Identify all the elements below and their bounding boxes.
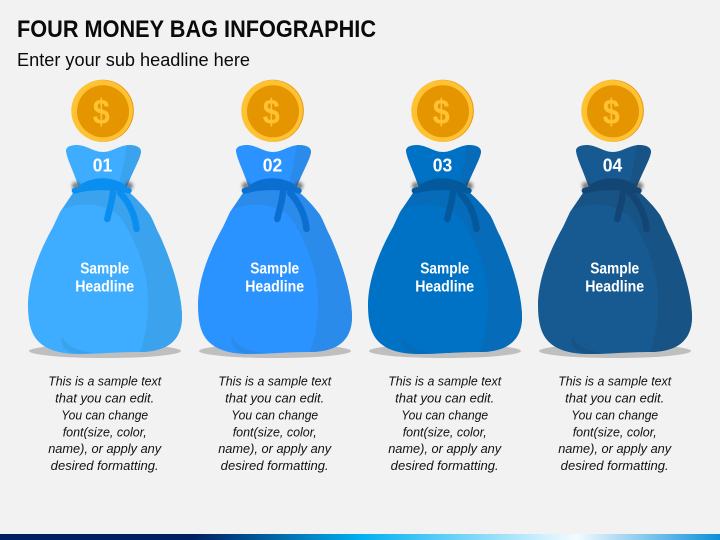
number 01: 01: [93, 156, 112, 176]
description 01: This is a sample text: [48, 374, 162, 388]
description 03: desired formatting.: [391, 458, 499, 473]
bag 02: [198, 145, 352, 354]
description 02: name), or apply any: [218, 441, 333, 456]
panel: money bag 02: [198, 80, 352, 473]
panel: money bag 01: [28, 80, 182, 473]
description 02: desired formatting.: [221, 458, 329, 473]
footer gradient bar: [0, 534, 720, 540]
number 02: 02: [263, 156, 282, 176]
description 03: that you can edit.: [395, 390, 494, 405]
icon: coin 02: [241, 80, 304, 142]
description 03: name), or apply any: [388, 441, 503, 456]
description 04: [558, 374, 673, 473]
bag headline 02: Headline: [245, 279, 305, 296]
description 01: that you can edit.: [55, 390, 154, 405]
bag shadow 04: [539, 344, 691, 358]
icon: coin 01: [71, 80, 134, 142]
description 03: You can change: [401, 407, 488, 422]
description 04: that you can edit.: [565, 390, 664, 405]
bag shadow 03: [369, 344, 521, 358]
title: FOUR MONEY BAG INFOGRAPHIC: [17, 16, 376, 43]
description 03: font(size, color,: [403, 424, 487, 439]
description 03: This is a sample text: [388, 374, 502, 388]
description 04: This is a sample text: [558, 374, 672, 388]
description 04: font(size, color,: [573, 424, 657, 439]
panel: money bag 04: [538, 80, 692, 473]
bag headline 01: [75, 260, 135, 296]
description 01: desired formatting.: [51, 458, 159, 473]
icon: coin 02: $: [263, 93, 280, 132]
bag headline 04: Sample: [590, 260, 640, 277]
bag shadow 01: [29, 344, 181, 358]
icon: coin 04: [581, 80, 644, 142]
description 01: You can change: [61, 407, 148, 422]
description 01: font(size, color,: [63, 424, 147, 439]
number 03: 03: [433, 156, 452, 176]
bag headline 02: Sample: [250, 260, 300, 277]
bag headline 01: Sample: [80, 260, 130, 277]
description 04: desired formatting.: [561, 458, 669, 473]
icon: coin 04: $: [603, 93, 620, 132]
bag 01: [28, 145, 182, 354]
bag headline 04: Headline: [585, 279, 645, 296]
icon: coin 03: [411, 80, 474, 142]
bag 04: [538, 145, 692, 354]
bag headline 02: [245, 260, 305, 296]
description 02: You can change: [231, 407, 318, 422]
description 02: This is a sample text: [218, 374, 332, 388]
description 02: that you can edit.: [225, 390, 324, 405]
subtitle: Enter your sub headline here: [17, 50, 250, 70]
bag headline 03: [415, 260, 475, 296]
description 02: font(size, color,: [233, 424, 317, 439]
description 04: name), or apply any: [558, 441, 673, 456]
number 04: 04: [603, 156, 622, 176]
bag headline 03: Headline: [415, 279, 475, 296]
bag 03: [368, 145, 522, 354]
bag headline 04: [585, 260, 645, 296]
description 02: [218, 374, 333, 473]
bag shadow 02: [199, 344, 351, 358]
panel: money bag 03: [368, 80, 522, 473]
description 01: name), or apply any: [48, 441, 163, 456]
description 04: You can change: [571, 407, 658, 422]
description 03: [388, 374, 503, 473]
icon: coin 03: $: [433, 93, 450, 132]
bag headline 03: Sample: [420, 260, 470, 277]
description 01: [48, 374, 163, 473]
icon: coin 01: $: [93, 93, 110, 132]
bag headline 01: Headline: [75, 279, 135, 296]
